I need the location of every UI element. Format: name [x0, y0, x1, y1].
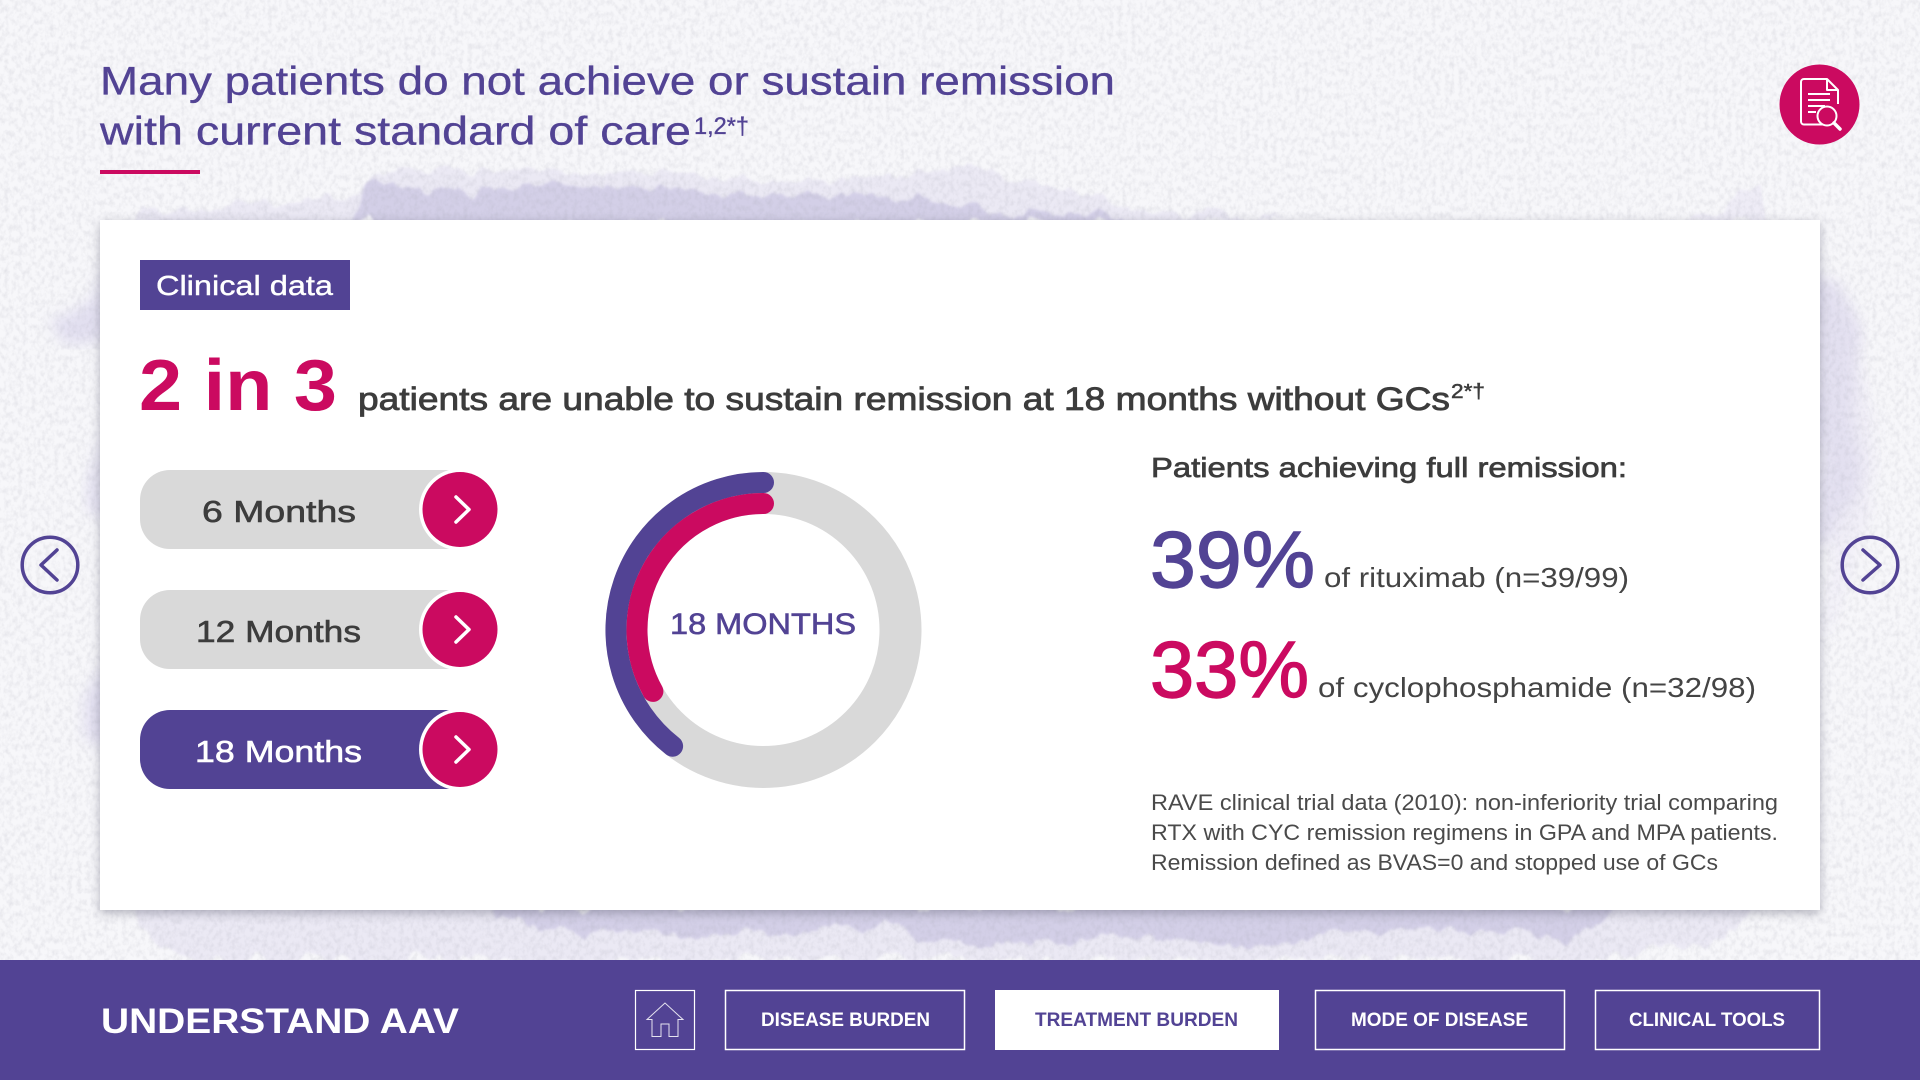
stat: rituximab	[1150, 515, 1629, 604]
headline statistic	[139, 346, 1485, 426]
stat: rituximab: 39%	[1150, 515, 1315, 604]
title: Many patients do not achieve or sustain remission	[100, 60, 1115, 104]
icon: next arrow	[1842, 537, 1898, 593]
button: 12 months: 12 Months	[196, 614, 361, 649]
trial note: RAVE clinical trial data (2010): non-inferiority trial comparing	[1151, 790, 1778, 815]
nav: treatment burden active: TREATMENT BURDEN	[1035, 1010, 1238, 1031]
stat: cyclophosphamide: of cyclophosphamide (n=32/98)	[1318, 672, 1756, 703]
donut chart: 18 MONTHS	[670, 608, 856, 641]
nav: clinical tools: CLINICAL TOOLS	[1629, 1010, 1785, 1031]
nav: disease burden	[726, 990, 964, 1050]
stat: cyclophosphamide: 33%	[1150, 625, 1309, 714]
nav: clinical tools	[1596, 990, 1820, 1050]
button: 18 months active: 18 Months	[195, 734, 362, 769]
button: 18 months active	[140, 708, 501, 790]
clinical data tag	[140, 260, 350, 310]
button: 12 months	[140, 588, 501, 670]
nav: disease burden: DISEASE BURDEN	[761, 1010, 930, 1031]
title: with current standard of care	[99, 110, 691, 154]
watercolour wash behind card	[48, 167, 1878, 960]
button: 6 months: 6 Months	[202, 494, 356, 529]
trial note: Remission defined as BVAS=0 and stopped use of GCs	[1151, 850, 1718, 875]
title	[99, 60, 1115, 154]
donut chart	[616, 482, 900, 767]
clinical data tag: Clinical data	[156, 270, 333, 301]
nav: mode of disease: MODE OF DISEASE	[1351, 1010, 1528, 1031]
footer bar	[0, 960, 1920, 1080]
title underline	[100, 170, 200, 174]
nav: home	[636, 990, 694, 1050]
nav: mode of disease	[1316, 990, 1564, 1050]
icon: document search	[1780, 64, 1860, 144]
panel: clinical data card	[100, 220, 1820, 910]
trial note: RTX with CYC remission regimens in GPA and MPA patients.	[1151, 820, 1778, 845]
title: 1,2*†	[694, 113, 749, 140]
remission heading: Patients achieving full remission:	[1151, 452, 1627, 483]
headline statistic: patients are unable to sustain remission at 18 months without GCs	[358, 381, 1450, 417]
stat: rituximab: of rituximab (n=39/99)	[1324, 562, 1629, 593]
headline statistic: 2 in 3	[139, 346, 337, 426]
headline statistic: 2*†	[1451, 381, 1485, 403]
stat: cyclophosphamide	[1150, 625, 1756, 714]
trial note	[1151, 790, 1778, 875]
icon: previous arrow	[22, 537, 78, 593]
button: 6 months	[140, 468, 501, 550]
nav: treatment burden active	[995, 990, 1279, 1050]
footer title: UNDERSTAND AAV	[101, 1001, 459, 1041]
